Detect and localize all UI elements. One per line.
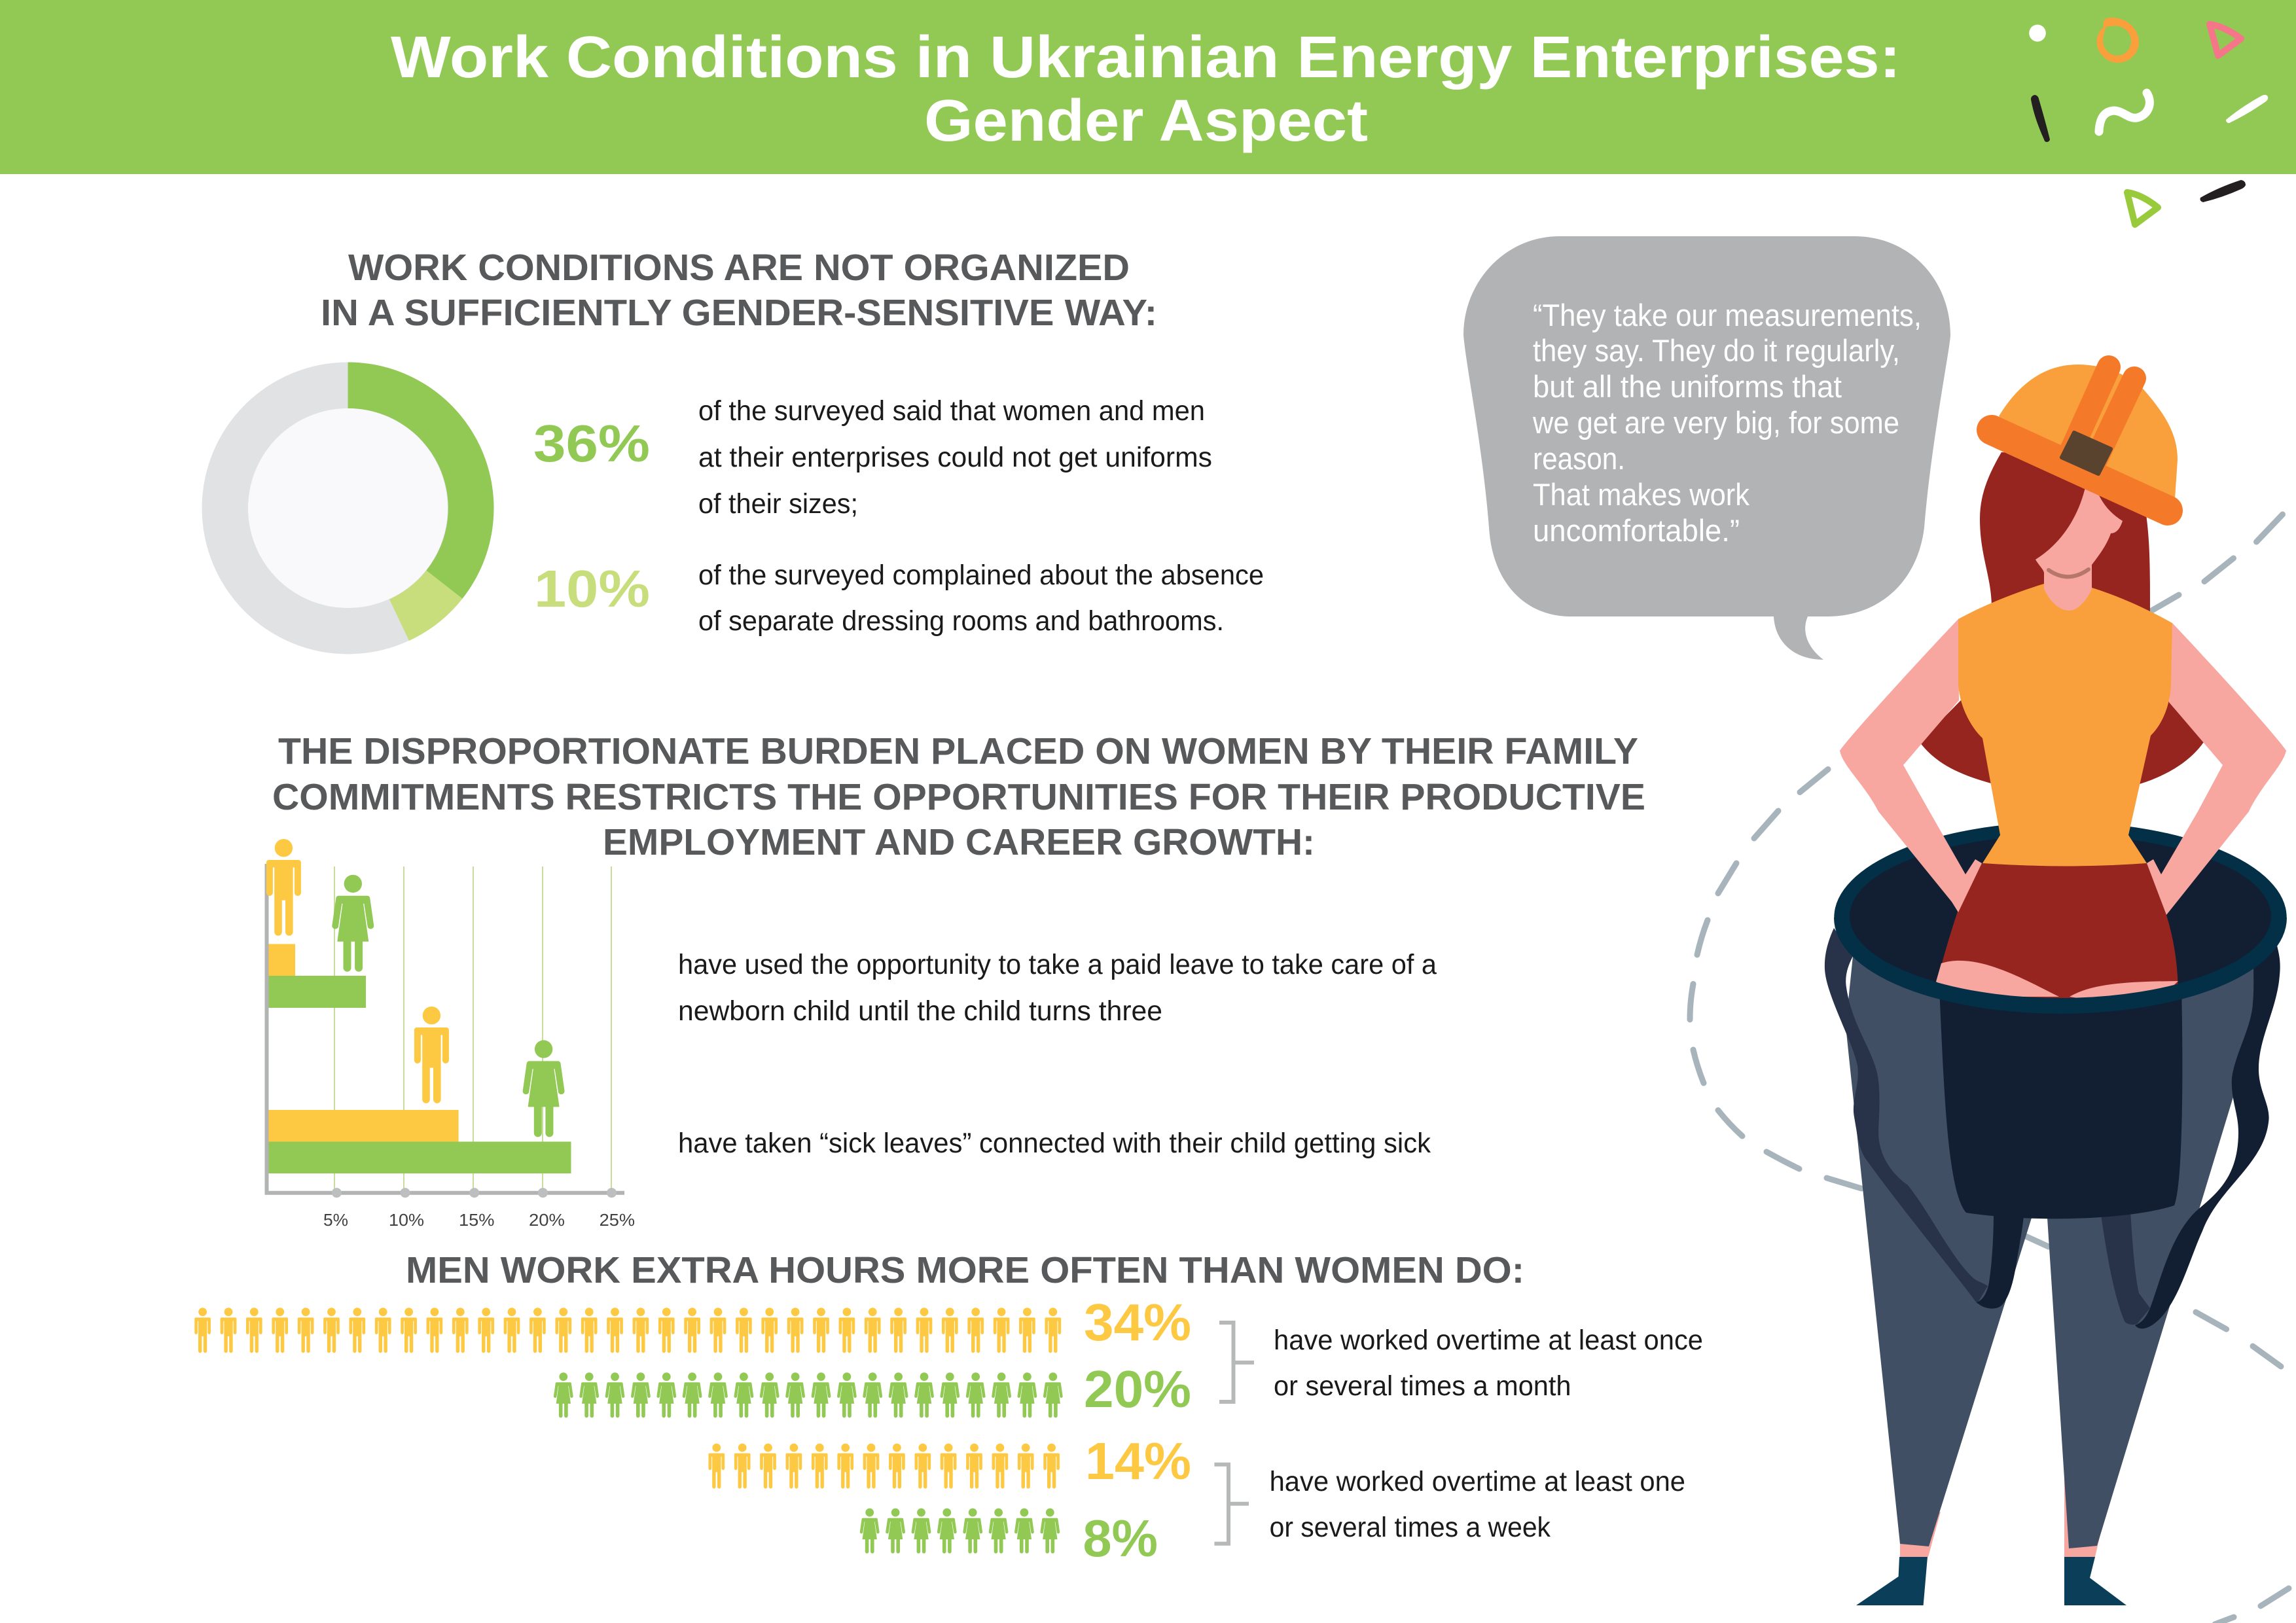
face and neck [2036, 488, 2123, 611]
text: dressing rooms: of the surveyed complained about the absence [698, 560, 1264, 591]
barrel front rim [1842, 918, 2279, 1006]
heading: family commitments: THE DISPROPORTIONATE BURDEN PLACED ON WOMEN BY THEIR FAMILY [278, 730, 1638, 772]
stat: 8%: 8% [1083, 1509, 1158, 1567]
dashed path behind figure [1690, 514, 2289, 1623]
top [1958, 584, 2172, 866]
header banner [0, 0, 2296, 174]
speech bubble: uncomfortable.” [1533, 513, 1740, 548]
heading: work conditions: IN A SUFFICIENTLY GENDER-SENSITIVE WAY: [321, 292, 1157, 334]
gender icons [266, 839, 565, 1137]
heading: family commitments: EMPLOYMENT AND CAREER GROWTH: [603, 821, 1315, 863]
text: paid leave: have used the opportunity to take a paid leave to take care of a [678, 949, 1437, 980]
pictogram row: women 20% [554, 1372, 1063, 1418]
left trouser shadow [1825, 928, 1988, 1304]
text: uniforms: of the surveyed said that women and men [698, 395, 1205, 427]
shorts [1936, 863, 2178, 1001]
axis labels [323, 1210, 635, 1230]
heading: work conditions: WORK CONDITIONS ARE NOT ORGANIZED [348, 247, 1130, 289]
donut chart [202, 363, 493, 654]
text: sick leaves: have taken “sick leaves” connected with their child getting sick [678, 1128, 1431, 1159]
speech bubble: we get are very big, for some [1532, 405, 1899, 440]
boots [1856, 1557, 2126, 1605]
text: uniforms: at their enterprises could not get uniforms [698, 442, 1212, 473]
axes [267, 864, 624, 1193]
speech bubble: they say. They do it regularly, [1533, 333, 1900, 368]
text: monthly overtime [1274, 1325, 1703, 1402]
speech bubble [1463, 236, 1950, 660]
stat: 36%: 36% [533, 414, 650, 473]
arms [1840, 619, 2286, 915]
bars [268, 944, 571, 1173]
figure: woman in oversized trousers [1825, 365, 2287, 1605]
pictogram row: men 34% [194, 1308, 1061, 1353]
axis labels: 20% [529, 1210, 565, 1230]
text: monthly overtime: have worked overtime at least once [1274, 1325, 1703, 1356]
stat: 10%: 10% [534, 560, 650, 618]
left strap [1977, 1211, 2024, 1309]
bar chart [266, 839, 635, 1230]
pictogram row: men 14% [708, 1444, 1060, 1489]
text: weekly overtime: or several times a week [1270, 1512, 1551, 1543]
axis labels: 25% [600, 1210, 635, 1230]
text: uniforms: of their sizes; [698, 488, 858, 520]
stat: 34%: 34% [1084, 1293, 1191, 1351]
heading: family commitments: COMMITMENTS RESTRICTS THE OPPORTUNITIES FOR THEIR PRODUCTIVE [272, 776, 1645, 818]
hard hat [1999, 365, 2178, 499]
ankles [1900, 1459, 2101, 1557]
buckle [2062, 433, 2111, 474]
heading: family commitments [272, 730, 1645, 863]
bracket: monthly [1219, 1323, 1254, 1402]
hair [1920, 452, 2204, 784]
right strap [2135, 946, 2280, 1329]
stat: 20%: 20% [1084, 1360, 1191, 1418]
text: uniforms [698, 395, 1212, 520]
text: weekly overtime [1270, 1466, 1685, 1543]
trousers [1846, 956, 2255, 1548]
mouth line [2049, 569, 2089, 577]
title: Gender Aspect [924, 88, 1368, 154]
text: dressing rooms: of separate dressing rooms and bathrooms. [698, 605, 1224, 637]
speech bubble: but all the uniforms that [1533, 369, 1842, 404]
text: dressing rooms [698, 560, 1264, 637]
speech bubble: “They take our measurements, [1533, 298, 1922, 332]
text: monthly overtime: or several times a month [1274, 1370, 1571, 1402]
hat stripes [2068, 367, 2134, 460]
barrel front [1939, 988, 2182, 1219]
text: paid leave [678, 949, 1437, 1027]
decorative confetti icons [2029, 18, 2268, 224]
speech bubble: That makes work [1533, 477, 1749, 512]
text: weekly overtime: have worked overtime at least one [1270, 1466, 1685, 1497]
heading: work conditions [321, 247, 1157, 334]
axis labels: 10% [389, 1210, 424, 1230]
axis labels: 15% [459, 1210, 495, 1230]
hat brim [1992, 430, 2168, 510]
speech bubble: reason. [1533, 441, 1625, 476]
thighs [1936, 961, 2178, 999]
pictogram row: women 8% [860, 1508, 1060, 1554]
title [391, 25, 1901, 154]
title: Work Conditions in Ukrainian Energy Enterprises: [391, 25, 1901, 90]
stat: 14%: 14% [1085, 1432, 1191, 1490]
right trouser shadow [2100, 1211, 2150, 1325]
barrel rim and interior [1834, 822, 2287, 1012]
heading: extra hours: MEN WORK EXTRA HOURS MORE OFTEN THAN WOMEN DO: [406, 1249, 1524, 1291]
axis labels: 5% [323, 1210, 348, 1230]
text: paid leave: newborn child until the child turns three [678, 995, 1162, 1027]
bracket: weekly [1214, 1465, 1249, 1544]
